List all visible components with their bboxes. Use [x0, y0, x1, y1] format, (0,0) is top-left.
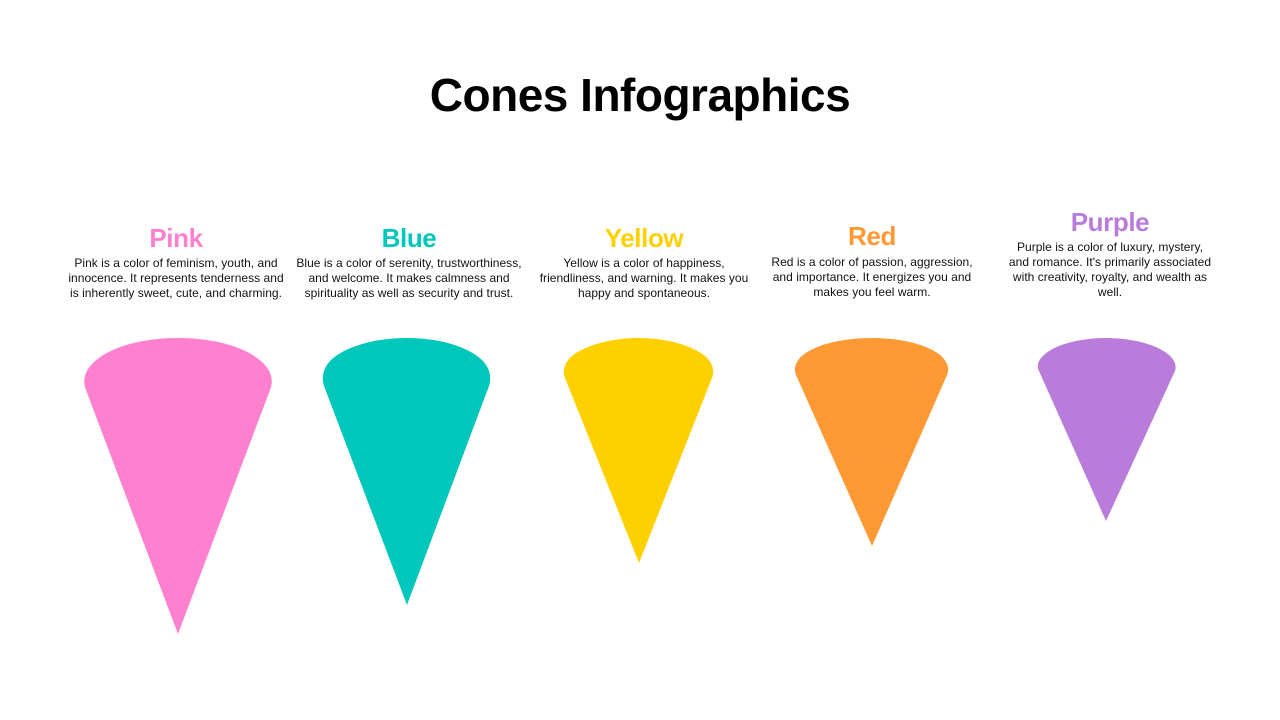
text: red description [771, 255, 973, 299]
text: blue description: spirituality as well as security and trust. [305, 286, 513, 300]
text: red description: and importance. It energizes you and [773, 270, 971, 284]
heading: blue: Blue [382, 223, 436, 253]
icon: blue cone [323, 338, 490, 605]
icon: pink cone [84, 338, 272, 634]
heading: purple: Purple [1071, 207, 1149, 237]
text: blue description [296, 256, 522, 300]
text: blue description: Blue is a color of serenity, trustworthiness, [296, 256, 522, 270]
text: pink description: Pink is a color of feminism, youth, and [74, 256, 278, 270]
text: purple description: Purple is a color of luxury, mystery, [1017, 240, 1203, 254]
heading: red: Red [848, 221, 896, 251]
heading: pink: Pink [149, 223, 203, 253]
text: pink description [68, 256, 284, 300]
text: yellow description: Yellow is a color of happiness, [563, 256, 725, 270]
heading: yellow: Yellow [605, 223, 683, 253]
text: purple description: with creativity, royalty, and wealth as [1013, 270, 1207, 284]
icon: yellow cone [564, 338, 713, 563]
text: pink description: innocence. It represents tenderness and [68, 271, 284, 285]
text: blue description: and welcome. It makes calmness and [308, 271, 510, 285]
text: pink description: is inherently sweet, cute, and charming. [70, 286, 282, 300]
text: yellow description: happy and spontaneous. [578, 286, 710, 300]
text: red description: makes you feel warm. [813, 285, 931, 299]
text: yellow description [540, 256, 748, 300]
text: purple description [1009, 240, 1211, 299]
text: purple description: and romance. It's primarily associated [1009, 255, 1211, 269]
title: Cones Infographics [430, 69, 850, 121]
icon: purple cone [1038, 338, 1176, 521]
icon: orange cone [795, 338, 948, 546]
text: yellow description: friendliness, and warning. It makes you [540, 271, 748, 285]
text: purple description: well. [1098, 285, 1122, 299]
text: red description: Red is a color of passion, aggression, [771, 255, 973, 269]
